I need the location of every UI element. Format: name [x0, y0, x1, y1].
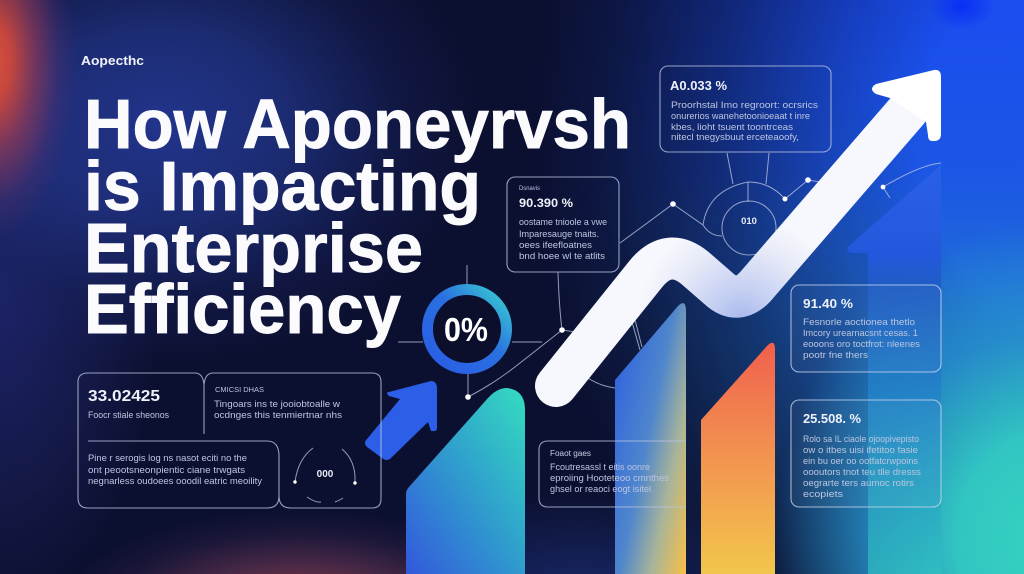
- panel: right stat one: 91.40 %: [803, 297, 853, 311]
- icon: dashed dial: 000: [317, 469, 334, 480]
- panel: middle stat: Imparesauge tnaits.: [519, 229, 599, 240]
- title: Enterprise: [84, 209, 423, 287]
- panel: top right stat: A0.033 %: [670, 79, 727, 93]
- panel: top right stat: kbes, lioht tsuent toontrceas: [671, 122, 793, 133]
- panel: right stat one: Fesnorle aoctionea thetlo: [803, 317, 915, 328]
- panel: left stat group: Pine r serogis log ns nasot eciti no the: [88, 453, 247, 464]
- panel: bottom centre note: Foaot gaes: [550, 449, 591, 458]
- panel: left stat group: 33.02425: [88, 388, 160, 405]
- panel: right stat two: Rolo sa IL ciaole ojoopivepisto: [803, 434, 919, 445]
- panel: top right stat: onurerios wanehetoonioeaat t inre: [671, 111, 810, 122]
- title: [84, 85, 631, 348]
- panel: left stat group: ont peootsneonpientic ciane trwgats: [88, 465, 245, 476]
- panel: right stat one: Imcory urearnacsnt cesas. 1: [803, 328, 918, 339]
- percent ring: 0%: [444, 311, 488, 348]
- panel: right stat two: ein bu oer oo ootfatcrwpoins: [803, 456, 918, 467]
- panel: right stat two: ow o itbes uisi ifetitoo fasie: [803, 445, 918, 456]
- title: is Impacting: [84, 147, 481, 225]
- white growth arrow: [556, 70, 941, 386]
- title: How Aponeyrvsh: [84, 85, 631, 163]
- panel: middle stat: oees ifeefloatnes: [519, 240, 592, 251]
- panel: right stat two: ecopiets: [803, 489, 843, 500]
- panel: top right stat: nitecl tnegysbuut erceteaoofy,: [671, 132, 799, 143]
- blue small arrow: [365, 381, 437, 460]
- panel: right stat two: [791, 400, 941, 507]
- panel: right stat one: eooons oro toctfrot: nleenes: [803, 339, 920, 350]
- percent ring: [428, 290, 506, 368]
- panel: left stat group: Tingoars ins te jooiobtoalle w: [214, 399, 340, 410]
- label: brand: Aopecthc: [81, 54, 144, 68]
- panel: right stat two: oooutors tnot teu tlle dresss: [803, 467, 921, 478]
- panel: left stat group: CMICSI DHAS: [215, 385, 264, 394]
- panel: left stat group: negnarless oudoees ooodil eatric meoility: [88, 476, 262, 487]
- bar: red-yellow: [701, 343, 775, 574]
- panel: bottom centre note: ghsel or reaoci eogt isitel: [550, 484, 651, 495]
- bar: right blue: [847, 165, 941, 574]
- chart: connector lines and nodes: [398, 153, 941, 400]
- panel: bottom centre note: Fcoutresassl t eitis oonre: [550, 462, 650, 473]
- panel: top right stat: Proorhstal Imo regroort: ocrsrics: [671, 100, 818, 111]
- chart: connector lines and nodes: 010: [741, 216, 757, 227]
- title: Efficiency: [84, 270, 401, 348]
- panel: middle stat: Dsnavis: [519, 185, 541, 192]
- panel: left stat group: Foocr stiale sheonos: [88, 410, 169, 421]
- panel: middle stat: [507, 177, 619, 272]
- bar: blue-yellow: [615, 303, 686, 574]
- panel: middle stat: 90.390 %: [519, 196, 573, 210]
- panel: right stat one: [791, 285, 941, 372]
- bar: blue-teal: [406, 388, 525, 574]
- panel: bottom centre note: eproiing Hooteteoo cmnthes: [550, 473, 669, 484]
- panel: right stat two: 25.508. %: [803, 412, 861, 426]
- panel: left stat group: ocdnges this tenmiertnar nhs: [214, 410, 342, 421]
- icon: dashed dial: [293, 448, 357, 502]
- panel: top right stat: [660, 66, 831, 152]
- panel: right stat one: pootr fne thers: [803, 350, 868, 361]
- panel: right stat two: oegrarte ters aumoc rotirs: [803, 478, 914, 489]
- panel: left stat group: [78, 373, 381, 508]
- panel: bottom centre note: [539, 441, 686, 507]
- panel: middle stat: oostame tnioole a vwe: [519, 217, 607, 228]
- panel: middle stat: bnd hoee wl te atlits: [519, 251, 605, 262]
